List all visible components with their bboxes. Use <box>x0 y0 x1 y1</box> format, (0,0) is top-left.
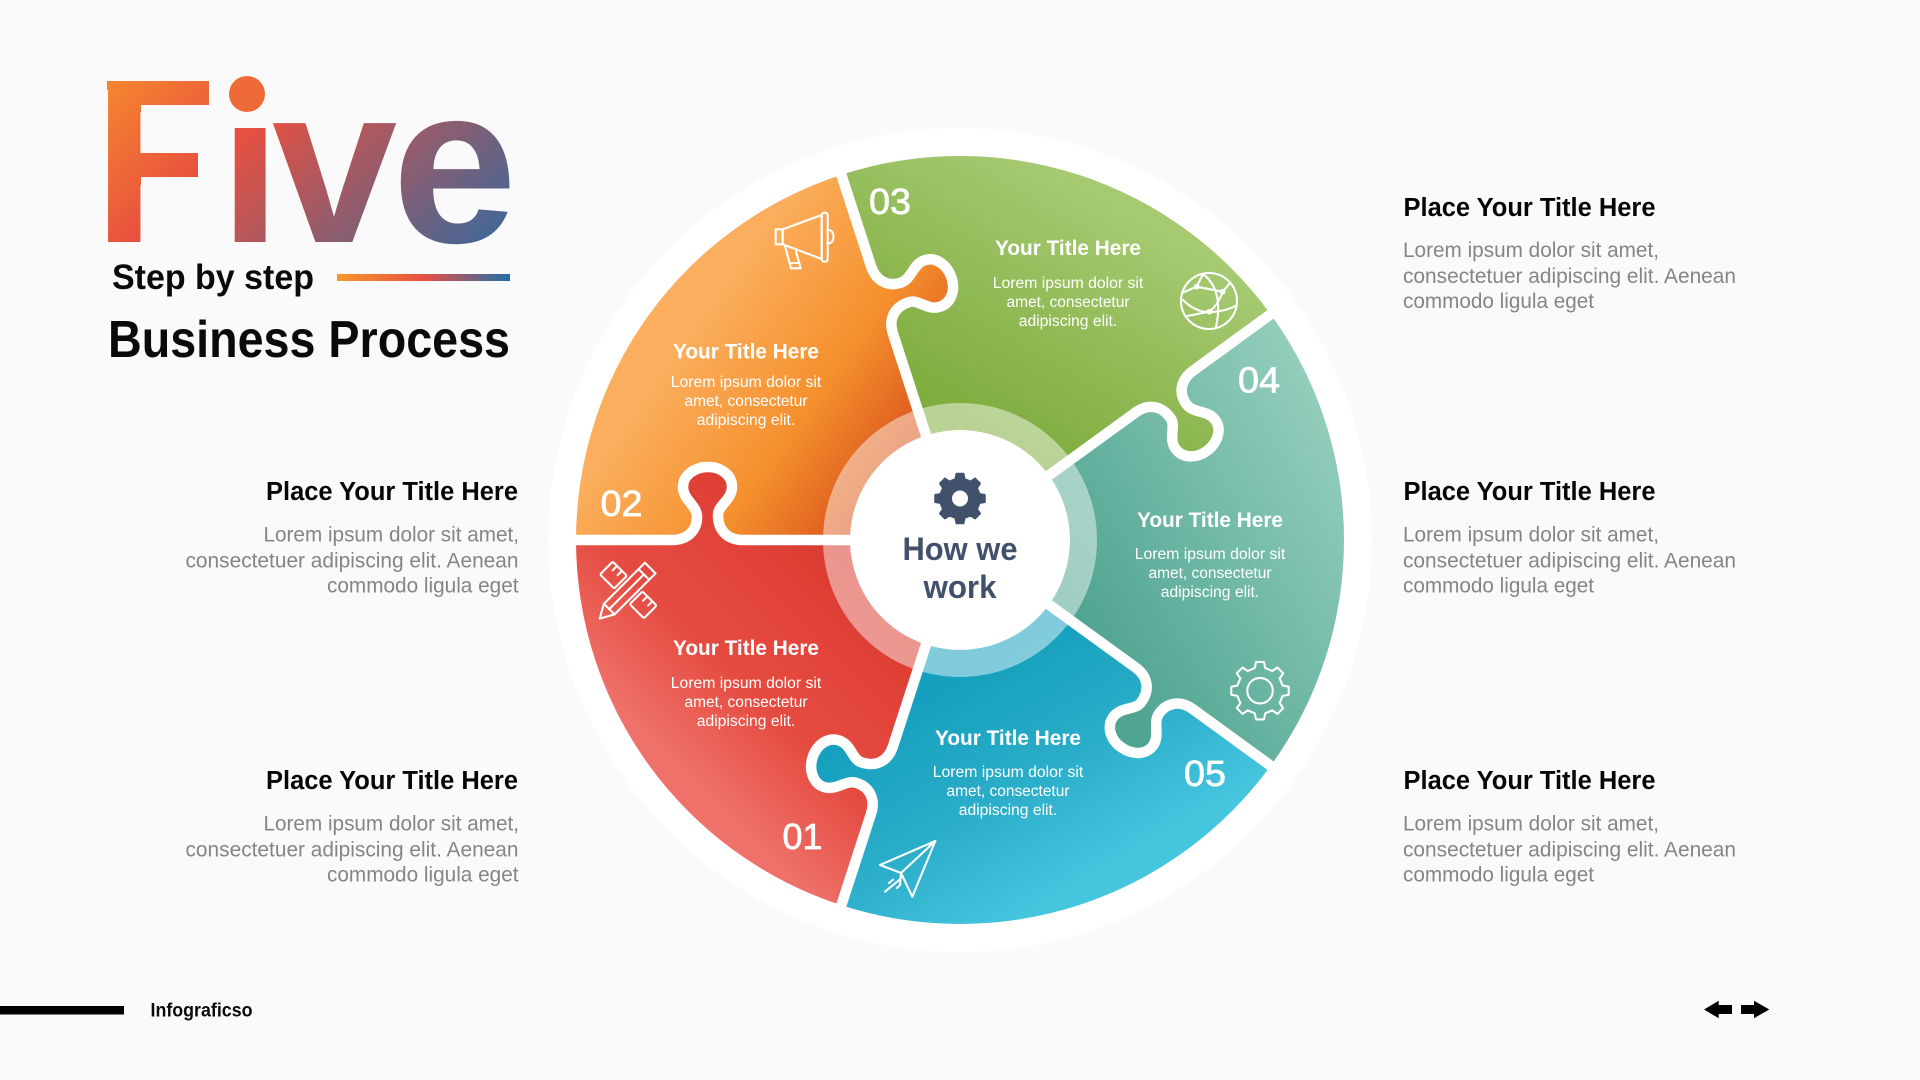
title: Five Step by step Business Process <box>93 38 517 369</box>
piece 03 content: Your Title Here <box>995 237 1141 260</box>
piece 01 content: adipiscing elit. <box>697 713 795 730</box>
text block: left middle <box>186 478 519 598</box>
piece 04 content: amet, consectetur <box>1148 565 1272 582</box>
piece 05 content: 05 <box>1184 753 1226 794</box>
text block: left middle: commodo ligula eget <box>327 574 519 598</box>
puzzle wheel backing circle <box>548 128 1372 952</box>
translucent ring around hub <box>836 416 1084 664</box>
piece 05 content: adipiscing elit. <box>959 802 1057 819</box>
hub label <box>902 531 1018 605</box>
panel: puzzle piece 03 green <box>841 62 1307 540</box>
arrow: next <box>1741 1001 1769 1018</box>
piece 03 content: amet, consectetur <box>1006 294 1130 311</box>
text block: left middle: consectetuer adipiscing elit. Aenean <box>186 550 518 572</box>
piece 04 content: Your Title Here <box>1137 509 1283 532</box>
piece 05 content: Your Title Here <box>935 727 1081 750</box>
panel: puzzle piece 05 blue <box>745 540 1271 1061</box>
panel: puzzle piece 04 teal <box>960 314 1485 835</box>
icon: solid gear <box>935 474 985 523</box>
text block: right top <box>1403 194 1736 313</box>
piece 01 content: Lorem ipsum dolor sit <box>671 675 822 692</box>
hub label: work <box>923 569 997 605</box>
piece 01 content: Your Title Here <box>673 637 819 660</box>
text block: left bottom: consectetuer adipiscing elit. Aenean <box>186 838 518 862</box>
piece 04 content: Lorem ipsum dolor sit <box>1135 546 1286 563</box>
panel: puzzle piece 02 orange <box>576 175 960 540</box>
center hub: How we work <box>850 430 1070 650</box>
text block: right bottom: consectetuer adipiscing elit. Aenean <box>1403 838 1736 862</box>
text block: right top: consectetuer adipiscing elit. Aenean <box>1403 265 1736 288</box>
panel: puzzle piece 01 red <box>494 427 960 905</box>
piece 02 content: adipiscing elit. <box>697 412 795 429</box>
text block: left bottom: Place Your Title Here <box>266 767 518 795</box>
piece 01 content <box>594 562 822 857</box>
text block: right middle: consectetuer adipiscing elit. Aenean <box>1403 550 1736 572</box>
text block: right middle: Lorem ipsum dolor sit amet, <box>1403 524 1659 546</box>
piece 05 content: amet, consectetur <box>946 783 1070 800</box>
text block: right middle: commodo ligula eget <box>1403 574 1594 598</box>
piece 05 content: Lorem ipsum dolor sit <box>933 764 1084 781</box>
text block: left bottom: Lorem ipsum dolor sit amet, <box>264 812 519 836</box>
piece 03 content: Lorem ipsum dolor sit <box>993 275 1144 292</box>
icon: network globe <box>1181 273 1237 329</box>
text block: right bottom: Place Your Title Here <box>1404 767 1656 795</box>
text block: right top: Place Your Title Here <box>1404 194 1656 222</box>
text block: right bottom: Lorem ipsum dolor sit amet, <box>1403 812 1659 836</box>
text block: right top: commodo ligula eget <box>1403 290 1594 313</box>
footer bar <box>0 1006 124 1014</box>
icon: outline gear <box>1231 662 1289 719</box>
footer brand: Infograficso <box>150 1000 252 1022</box>
piece 05 content <box>880 727 1226 897</box>
piece 02 content: amet, consectetur <box>684 393 808 410</box>
arrow: previous <box>1704 1001 1732 1018</box>
piece 03 content: 03 <box>869 181 911 222</box>
gradient rule <box>337 274 510 281</box>
piece 03 content <box>869 181 1237 330</box>
text block: left middle: Lorem ipsum dolor sit amet, <box>264 524 519 546</box>
subheading: Business Process: Business Process <box>108 311 510 369</box>
subheading: Step by step: Step by step <box>112 258 314 297</box>
heading: Five: Five <box>93 38 517 290</box>
piece 03 content: adipiscing elit. <box>1019 313 1117 330</box>
text block: right bottom: commodo ligula eget <box>1403 864 1594 886</box>
piece 01 content: 01 <box>782 816 822 857</box>
piece 04 content <box>1135 360 1289 719</box>
icon: paper plane <box>880 841 935 897</box>
piece 02 content: Your Title Here <box>673 340 819 364</box>
text block: right middle: Place Your Title Here <box>1404 478 1656 506</box>
piece 01 content: amet, consectetur <box>684 694 808 711</box>
icon: megaphone <box>776 213 834 268</box>
piece 02 content: Lorem ipsum dolor sit <box>671 374 822 391</box>
text block: left middle: Place Your Title Here <box>266 478 518 506</box>
text block: right top: Lorem ipsum dolor sit amet, <box>1403 239 1659 262</box>
text block: right bottom <box>1403 767 1736 886</box>
piece 02 content: 02 <box>600 483 642 524</box>
piece 04 content: 04 <box>1238 360 1280 400</box>
text block: right middle <box>1403 478 1736 598</box>
piece 02 content <box>600 213 834 524</box>
hub label: How we <box>902 531 1018 567</box>
text block: left bottom: commodo ligula eget <box>327 864 519 886</box>
icon: pencil and ruler <box>594 562 657 624</box>
text block: left bottom <box>186 767 519 886</box>
piece 04 content: adipiscing elit. <box>1161 584 1259 601</box>
